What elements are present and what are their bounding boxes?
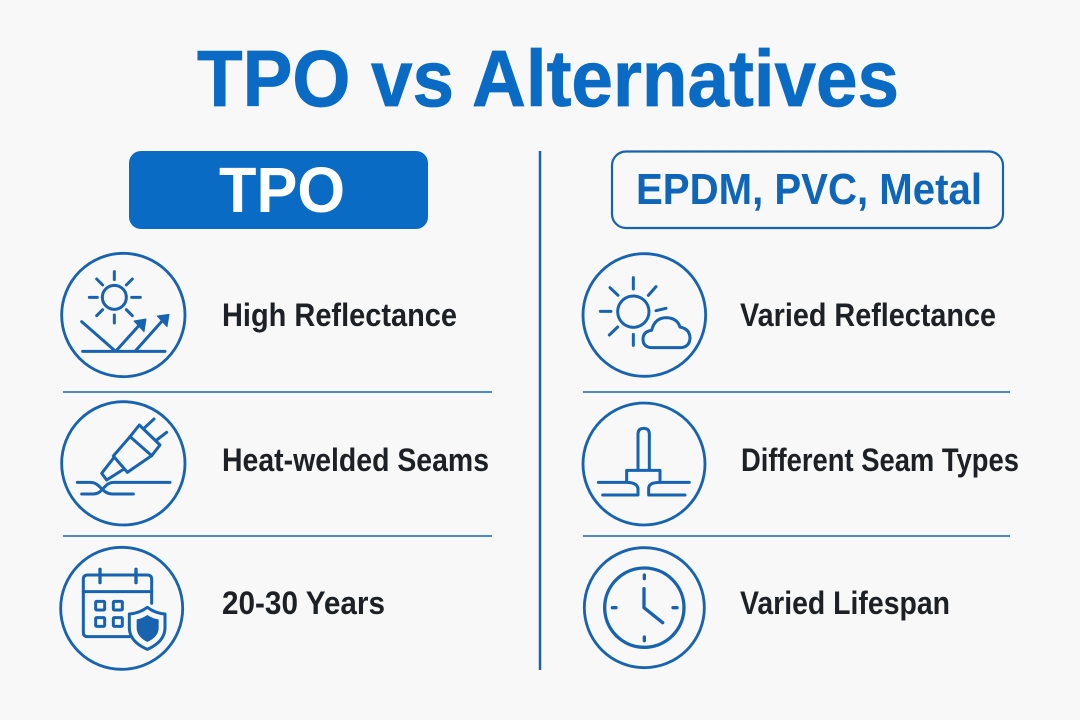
panel: TPO header bbox=[129, 151, 428, 229]
icon: heat welding tool bbox=[62, 402, 185, 525]
panel: TPO header: TPO bbox=[219, 154, 345, 226]
label: lifespan 20-30 years: 20-30 Years bbox=[222, 585, 385, 621]
icon: calendar with shield bbox=[61, 547, 183, 669]
icon: seam cross-section bbox=[583, 403, 705, 525]
panel: alternatives header: EPDM, PVC, Metal bbox=[636, 165, 982, 214]
label: varied reflectance: Varied Reflectance bbox=[740, 297, 996, 333]
label: varied lifespan: Varied Lifespan bbox=[740, 585, 950, 621]
label: different seam types: Different Seam Types bbox=[741, 442, 1019, 478]
title: TPO vs Alternatives bbox=[197, 34, 899, 123]
icon: clock bbox=[584, 548, 704, 668]
icon: sun reflecting off roof bbox=[62, 253, 185, 377]
icon: sun and cloud bbox=[583, 254, 706, 376]
label: high reflectance: High Reflectance bbox=[222, 297, 457, 333]
panel: alternatives header bbox=[612, 152, 1003, 228]
label: heat-welded seams: Heat-welded Seams bbox=[222, 442, 489, 478]
